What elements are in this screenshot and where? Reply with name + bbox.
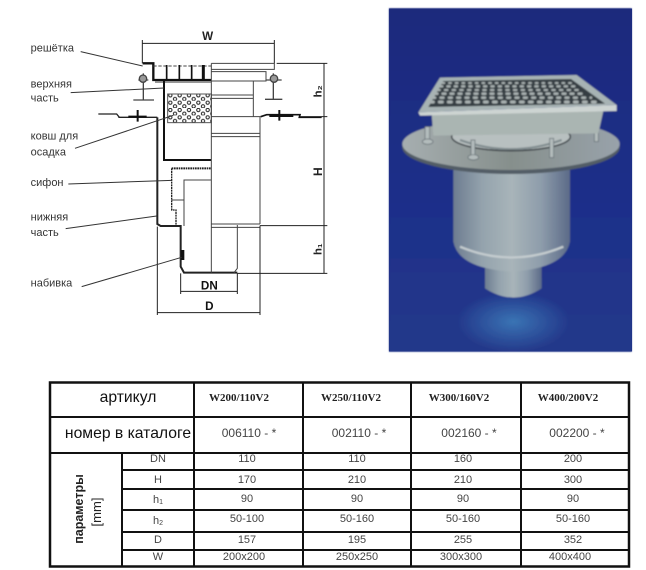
values W250: 210 [348, 474, 366, 486]
values W300 [440, 453, 482, 563]
values W200 [223, 453, 265, 563]
dimension label h2: h₂ [313, 85, 325, 97]
values W200: 110 [238, 453, 256, 465]
catalogue numbers: 002160 - * [441, 426, 497, 440]
flange [402, 121, 620, 174]
values W400: 90 [567, 493, 579, 505]
callout labels: часть [31, 92, 59, 104]
parameter names: W [153, 551, 164, 563]
values W200: 157 [238, 534, 256, 546]
callout labels [31, 43, 78, 290]
values W400 [549, 453, 591, 563]
parameter names [150, 453, 166, 563]
dimension lines right [237, 63, 327, 273]
dimension DN [181, 273, 237, 294]
grate box [432, 111, 603, 136]
parameter names: 1 [159, 499, 163, 506]
dimension D: D [205, 300, 214, 313]
floor glow [457, 292, 570, 352]
values W250: 195 [348, 534, 366, 546]
perforated bucket [168, 94, 211, 123]
technical drawing [31, 30, 327, 315]
callout labels: верхняя [31, 78, 72, 90]
parameter names: H [154, 474, 162, 486]
callout labels: решётка [31, 43, 75, 55]
values W250 [336, 453, 378, 563]
catalogue numbers: 002200 - * [549, 426, 605, 440]
catalogue numbers [222, 426, 605, 440]
dimension W: W [202, 30, 213, 43]
values W300: 50-160 [446, 513, 480, 525]
article codes [209, 392, 599, 404]
grate front rim [418, 105, 617, 116]
parameter names: h [153, 515, 159, 527]
grate studs [430, 83, 598, 102]
lower pipe [485, 262, 542, 297]
photo background [389, 8, 632, 352]
values W400: 200 [564, 453, 582, 465]
callout labels: набивка [31, 278, 73, 290]
grate inner [428, 79, 605, 107]
grate top frame [418, 75, 617, 112]
values W200: 50-100 [230, 513, 264, 525]
values W300: 300x300 [440, 551, 482, 563]
values W300: 160 [454, 453, 472, 465]
dimension W [142, 30, 274, 63]
parameters side heading [72, 474, 104, 544]
values W250: 50-160 [340, 513, 374, 525]
callout labels: нижняя [31, 212, 68, 224]
values W400: 300 [564, 474, 582, 486]
values W200: 170 [238, 474, 256, 486]
parameter names: D [154, 534, 162, 546]
parameter names: DN [150, 453, 166, 465]
row heading: article: артикул [100, 389, 156, 406]
values W250: 90 [351, 493, 363, 505]
article codes: W200/110V2 [209, 392, 269, 404]
callout labels: часть [31, 227, 59, 239]
parameters side heading: параметры [72, 474, 86, 544]
parameter names: 2 [159, 520, 163, 527]
values W300: 210 [454, 474, 472, 486]
dimension label h1: h₁ [313, 243, 325, 255]
parameters side heading: [mm] [89, 498, 104, 526]
bolts [422, 127, 598, 160]
floor mount bolts [128, 73, 293, 122]
values W400: 352 [564, 534, 582, 546]
right side outline [211, 63, 322, 273]
values W300: 255 [454, 534, 472, 546]
article codes: W250/110V2 [321, 392, 381, 404]
parameter names: h [153, 494, 159, 506]
callout labels: ковш для [31, 130, 78, 142]
article codes: W400/200V2 [538, 392, 599, 404]
callout labels: осадка [31, 146, 67, 158]
catalogue numbers: 002110 - * [332, 426, 387, 440]
table grid [50, 382, 629, 567]
collar [452, 123, 570, 151]
callout labels: сифон [31, 177, 64, 189]
leader lines [66, 52, 182, 287]
values W400: 400x400 [549, 551, 591, 563]
values W250: 110 [348, 453, 366, 465]
drain body [453, 165, 570, 272]
product photo [389, 8, 632, 352]
catalogue numbers: 006110 - * [222, 426, 277, 440]
values W400: 50-160 [556, 513, 590, 525]
left section outline [98, 63, 237, 273]
packing detail [178, 250, 188, 260]
values W250: 250x250 [336, 551, 378, 563]
dimension DN: DN [201, 279, 218, 292]
article codes: W300/160V2 [429, 392, 490, 404]
values W200: 90 [241, 493, 253, 505]
photo frame background [389, 8, 632, 352]
specification table [50, 382, 629, 567]
dimension D [157, 226, 260, 315]
values W300: 90 [457, 493, 469, 505]
values W200: 200x200 [223, 551, 265, 563]
row heading: catalogue number: номер в каталоге [65, 425, 191, 442]
dimension label H: H [311, 167, 325, 176]
